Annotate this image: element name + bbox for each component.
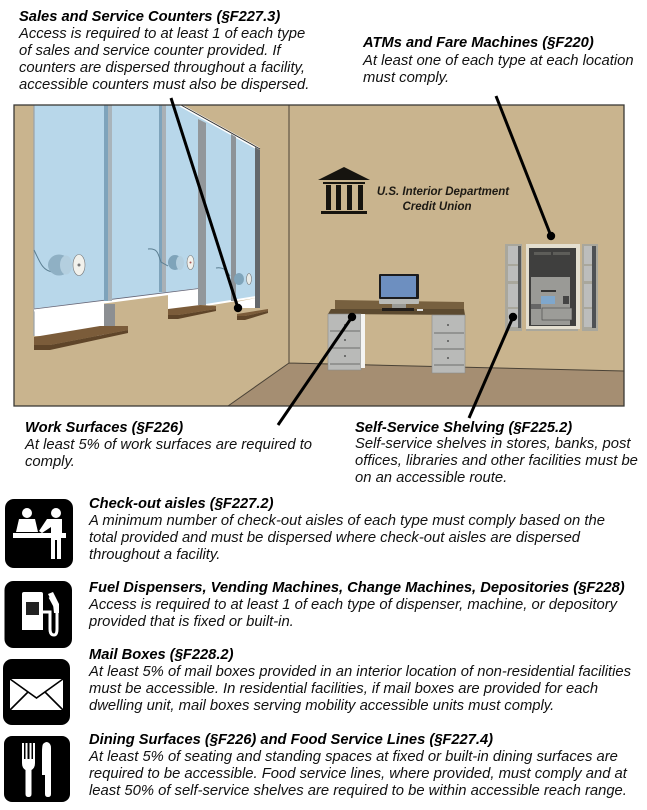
text: mail boxes: dwelling unit, mail boxes serving mobility accessible units must comply. (89, 698, 554, 714)
text: mail boxes: Mail Boxes (§F228.2) (89, 647, 234, 663)
text: self-service shelving: on an accessible route. (355, 470, 507, 486)
cable reels on windows (34, 249, 252, 285)
text: ATMs and fare machines: must comply. (363, 70, 449, 86)
computer monitor (379, 274, 423, 311)
credit union sign: U.S. Interior Department (377, 186, 510, 198)
pointer: self-service shelving (469, 313, 517, 418)
ATM machine (526, 244, 580, 329)
text: dining surfaces: least 50% of self-service shelves are required to be within accessible reach range. (89, 783, 627, 799)
panel: room illustration (14, 105, 624, 406)
left shelving (508, 246, 518, 327)
text: self-service shelving: offices, libraries and other facilities must be (355, 453, 638, 469)
icon: check-out counter (5, 499, 73, 568)
text: fuel dispensers: provided that is fixed or built-in. (88, 614, 294, 630)
text: check-out aisles (88, 496, 605, 563)
right shelving (584, 246, 592, 327)
pointer: ATMs and fare machines (496, 96, 555, 240)
work surface desk with computer (328, 274, 465, 373)
pointer: work surfaces (278, 313, 356, 425)
text: sales and service counters: Sales and Service Counters (§F227.3) (19, 9, 280, 25)
text: check-out aisles: total provided and must be dispersed where check-out aisles are dispersed (89, 530, 581, 546)
credit union sign (377, 186, 510, 213)
frame border (14, 105, 624, 406)
window wall with glazing (34, 105, 260, 336)
text: mail boxes: At least 5% of mail boxes provided in an interior location of non-residential facilities (88, 664, 632, 680)
text: dining surfaces: required to be accessible. Food service lines, where provided, must comply and at (89, 766, 628, 782)
text: dining surfaces (88, 732, 628, 799)
text: fuel dispensers: Access is required to at least 1 of each type of dispenser, machine, or depository (88, 597, 619, 613)
text: self-service shelving: Self-service shelves in stores, banks, post (355, 436, 631, 452)
text: check-out aisles: Check-out aisles (§F227.2) (89, 496, 274, 512)
pointer: sales and service counters (171, 98, 242, 312)
text: ATMs and fare machines: At least one of each type at each location (362, 53, 634, 69)
icon: fork and knife (4, 736, 70, 802)
bank logo icon (318, 167, 370, 214)
text: ATMs and fare machines (362, 35, 634, 86)
floor (228, 363, 624, 406)
text: ATMs and fare machines: ATMs and Fare Machines (§F220) (362, 35, 594, 51)
text: check-out aisles: throughout a facility. (89, 547, 220, 563)
text: work surfaces (24, 420, 312, 470)
text: sales and service counters: counters are dispersed throughout a facility, (19, 60, 305, 76)
text: work surfaces: Work Surfaces (§F226) (25, 420, 183, 436)
text: mail boxes: must be accessible. In residential facilities, if mail boxes are provided for each (89, 681, 598, 697)
ATM and self-service shelving (505, 244, 598, 331)
credit union sign: Credit Union (402, 201, 472, 213)
text: self-service shelving (355, 420, 638, 486)
sales and service counters (34, 305, 268, 350)
text: work surfaces: At least 5% of work surfaces are required to (24, 437, 312, 453)
text: sales and service counters: accessible counters must also be dispersed. (19, 77, 309, 93)
text: self-service shelving: Self-Service Shelving (§F225.2) (355, 420, 572, 436)
text: sales and service counters (18, 9, 309, 93)
text: dining surfaces: Dining Surfaces (§F226) and Food Service Lines (§F227.4) (89, 732, 493, 748)
text: fuel dispensers: Fuel Dispensers, Vending Machines, Change Machines, Depositories (§F228) (89, 580, 625, 596)
icon: envelope (3, 659, 70, 725)
text: work surfaces: comply. (25, 454, 75, 470)
text: sales and service counters: Access is required to at least 1 of each type (18, 26, 305, 42)
text: sales and service counters: of sales and service counter provided. If (19, 43, 282, 59)
text: dining surfaces: At least 5% of seating and standing spaces at fixed or built-in dining surfaces are (88, 749, 618, 765)
text: check-out aisles: A minimum number of check-out aisles of each type must comply based on the (88, 513, 605, 529)
icon: fuel pump (4, 581, 72, 648)
text: fuel dispensers (88, 580, 625, 630)
text: mail boxes (88, 647, 632, 714)
